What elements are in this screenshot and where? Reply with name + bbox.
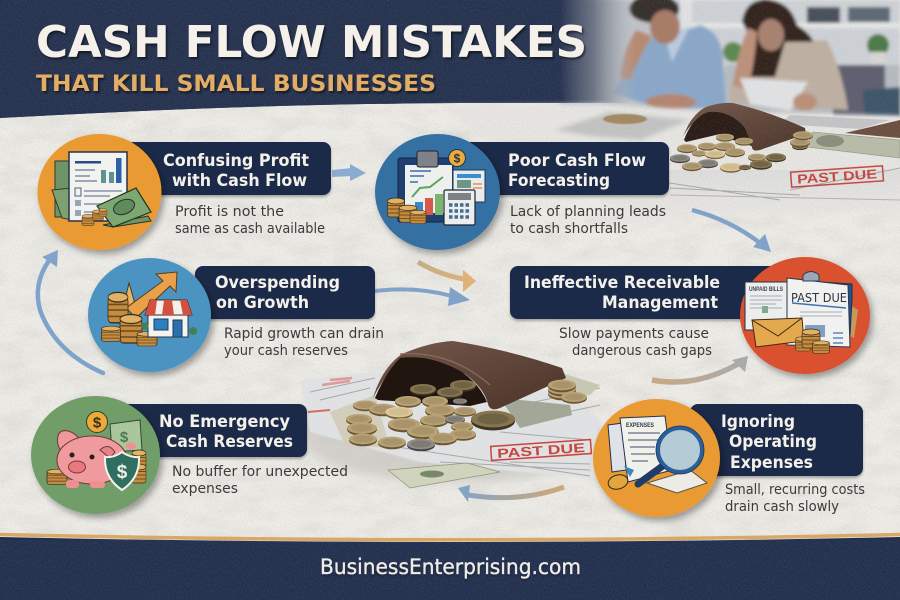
description <box>725 482 865 515</box>
icon: clipboard chart and calculator: $ <box>454 152 461 166</box>
description: Small, recurring costs <box>725 482 865 498</box>
heading pill <box>120 404 307 457</box>
heading pill: Forecasting <box>508 171 610 190</box>
description <box>559 326 712 359</box>
description <box>224 326 384 359</box>
header band <box>0 0 650 118</box>
wallet <box>373 341 566 409</box>
heading pill <box>195 266 375 319</box>
description: drain cash slowly <box>725 499 839 515</box>
stamp: past due: PAST DUE <box>797 166 878 187</box>
panel: no emergency cash reserves <box>31 396 348 514</box>
heading pill: on Growth <box>216 293 309 312</box>
icon: piggy bank and shield: $ <box>93 414 102 432</box>
heading pill: No Emergency <box>159 412 290 431</box>
description <box>175 204 325 237</box>
heading pill: Expenses <box>730 453 813 472</box>
description: your cash reserves <box>224 343 348 359</box>
panel: overspending on growth <box>88 258 384 372</box>
table papers under photo <box>440 104 900 225</box>
icon: magnifier over bills <box>593 399 720 517</box>
description: No buffer for unexpected <box>172 464 348 480</box>
heading pill: Cash Reserves <box>166 432 293 451</box>
panel: ineffective receivable management <box>510 257 870 374</box>
footer band <box>0 534 900 600</box>
icon: piggy bank and shield <box>31 396 160 514</box>
icon: growth arrow and store <box>88 258 211 372</box>
heading pill: with Cash Flow <box>172 171 307 190</box>
heading pill: Confusing Profit <box>163 151 309 170</box>
subtitle: THAT KILL SMALL BUSINESSES <box>36 72 436 97</box>
arrow: receivables cycle <box>652 356 748 382</box>
icon: report and cash <box>38 134 162 250</box>
wallet top with coins <box>670 103 900 187</box>
icon: past due notice and envelope <box>740 257 870 374</box>
footer website text: BusinessEnterprising.com <box>320 555 581 579</box>
heading pill <box>690 404 863 476</box>
description: Lack of planning leads <box>510 204 666 220</box>
arrow: tan to receivables <box>418 262 476 292</box>
description: Slow payments cause <box>559 326 709 342</box>
arrow: forecasting to receivables <box>692 210 771 252</box>
description: Rapid growth can drain <box>224 326 384 342</box>
stamp: past due <box>491 440 591 461</box>
description: expenses <box>172 481 238 497</box>
title: CASH FLOW MISTAKES <box>36 17 587 68</box>
heading pill <box>510 266 780 319</box>
heading pill: Operating <box>729 432 817 451</box>
description: dangerous cash gaps <box>572 343 712 359</box>
heading pill <box>460 142 669 195</box>
photo: stressed couple at table <box>560 0 900 117</box>
gold rule <box>0 534 900 540</box>
icon: piggy bank and shield: $ <box>117 462 128 483</box>
heading pill: Management <box>602 293 718 312</box>
heading pill <box>125 142 331 195</box>
bill right <box>807 132 900 158</box>
panel: poor cash flow forecasting <box>375 134 669 250</box>
icon: past due notice and envelope: UNPAID BILLS <box>749 287 783 293</box>
heading pill: Poor Cash Flow <box>508 151 646 170</box>
coins <box>346 380 587 451</box>
arrow: operating expenses to reserves <box>458 485 564 502</box>
icon: clipboard chart and calculator <box>375 134 500 250</box>
icon: piggy bank and shield: $ <box>120 429 129 446</box>
heading pill: Ineffective Receivable <box>524 273 720 292</box>
panel: ignoring operating expenses <box>593 399 865 517</box>
stamp: past due <box>791 166 883 187</box>
description <box>172 464 348 497</box>
description: to cash shortfalls <box>510 221 628 237</box>
panel: confusing profit with cash flow <box>38 134 331 250</box>
icon: past due notice and envelope: PAST DUE <box>791 291 847 305</box>
description: same as cash available <box>175 221 325 237</box>
icon: magnifier over bills: EXPENSES <box>626 423 654 429</box>
arrow: reserves up to profit <box>38 250 103 373</box>
central wallet with coins and bills <box>300 341 600 488</box>
heading pill: Overspending <box>215 273 340 292</box>
papers <box>300 372 600 483</box>
arrow: overspending to receivables <box>375 287 470 306</box>
description: Profit is not the <box>175 204 284 220</box>
bill <box>388 463 500 488</box>
description <box>510 204 666 237</box>
heading pill: Ignoring <box>721 412 795 431</box>
arrow: confusing profit to forecasting <box>332 164 366 181</box>
stamp: past due: PAST DUE <box>497 440 586 461</box>
